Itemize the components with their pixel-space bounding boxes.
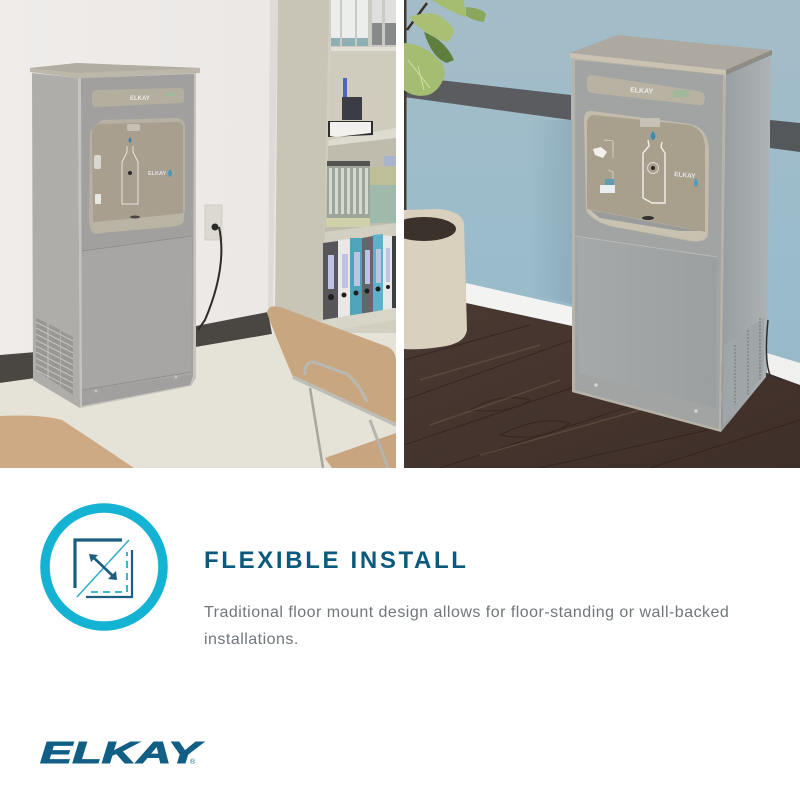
upper shelf back [329, 51, 396, 140]
side panel [721, 57, 771, 432]
brand logo: ELKAY [40, 735, 205, 770]
vent grille [36, 318, 73, 395]
wall-backed water unit: ELKAY [630, 87, 654, 96]
brand mark on panel: ELKAY [148, 171, 166, 177]
description text [204, 604, 729, 648]
blue wall [406, 0, 800, 385]
top cap [570, 35, 772, 70]
white baseboard [466, 283, 572, 326]
power cord [766, 320, 782, 380]
control strip [587, 75, 705, 105]
brand logo: ® [190, 758, 196, 766]
plant leaves [404, 0, 486, 96]
middle shelf back [325, 138, 396, 232]
description text: Traditional floor mount design allows for floor-standing or wall-backed [204, 604, 729, 621]
photo: blue wall room with wall-backed unit [392, 0, 800, 468]
diagonal line [77, 540, 129, 597]
dashed corner [91, 552, 127, 592]
shadow on wall [551, 120, 572, 304]
cabinet front [78, 72, 196, 408]
wall [0, 0, 378, 355]
spout [127, 124, 140, 131]
ring [45, 508, 163, 626]
table corner [0, 416, 134, 468]
description text: installations. [204, 631, 299, 648]
bottle outline [122, 146, 138, 204]
books top [331, 0, 396, 47]
wall-backed water unit [530, 35, 782, 432]
icon: flexible install circle badge [45, 508, 163, 626]
side pictograms [94, 155, 101, 169]
book stack [327, 163, 370, 218]
drip tray [587, 209, 706, 241]
brand mark on panel: ELKAY [674, 171, 696, 180]
wood floor [404, 303, 800, 468]
drip tray [106, 213, 184, 232]
lower panel [577, 237, 717, 408]
cabinet side [32, 73, 80, 408]
baseboard [0, 312, 272, 383]
logo on strip: ELKAY [130, 96, 150, 102]
lower right corner [86, 550, 132, 597]
photo: classroom floor-standing unit [0, 0, 396, 468]
solid wall corner [75, 540, 122, 588]
water drop icon [650, 131, 656, 140]
bottle filler alcove [584, 111, 709, 241]
front panel [572, 58, 726, 432]
double arrow [89, 554, 117, 580]
dark wall band [406, 80, 571, 120]
spout [640, 118, 660, 127]
paper tray [328, 121, 373, 137]
bottle outline [643, 140, 665, 203]
pencil cup [343, 78, 347, 97]
chair [267, 306, 396, 468]
bottle filler alcove [89, 118, 185, 234]
heading: FLEXIBLE INSTALL [204, 547, 469, 574]
water drop icon [128, 137, 132, 143]
binders [323, 241, 338, 320]
bookshelf [268, 0, 396, 333]
side pictograms [593, 147, 607, 158]
lower panel seam [82, 236, 192, 390]
control strip [92, 88, 184, 107]
brand logo [40, 735, 205, 770]
vent grille [723, 318, 764, 425]
top cap [30, 63, 200, 78]
floor-standing water unit [30, 63, 200, 408]
wall outlet and power cord [198, 205, 222, 330]
planter [404, 0, 467, 350]
floor [0, 333, 396, 468]
